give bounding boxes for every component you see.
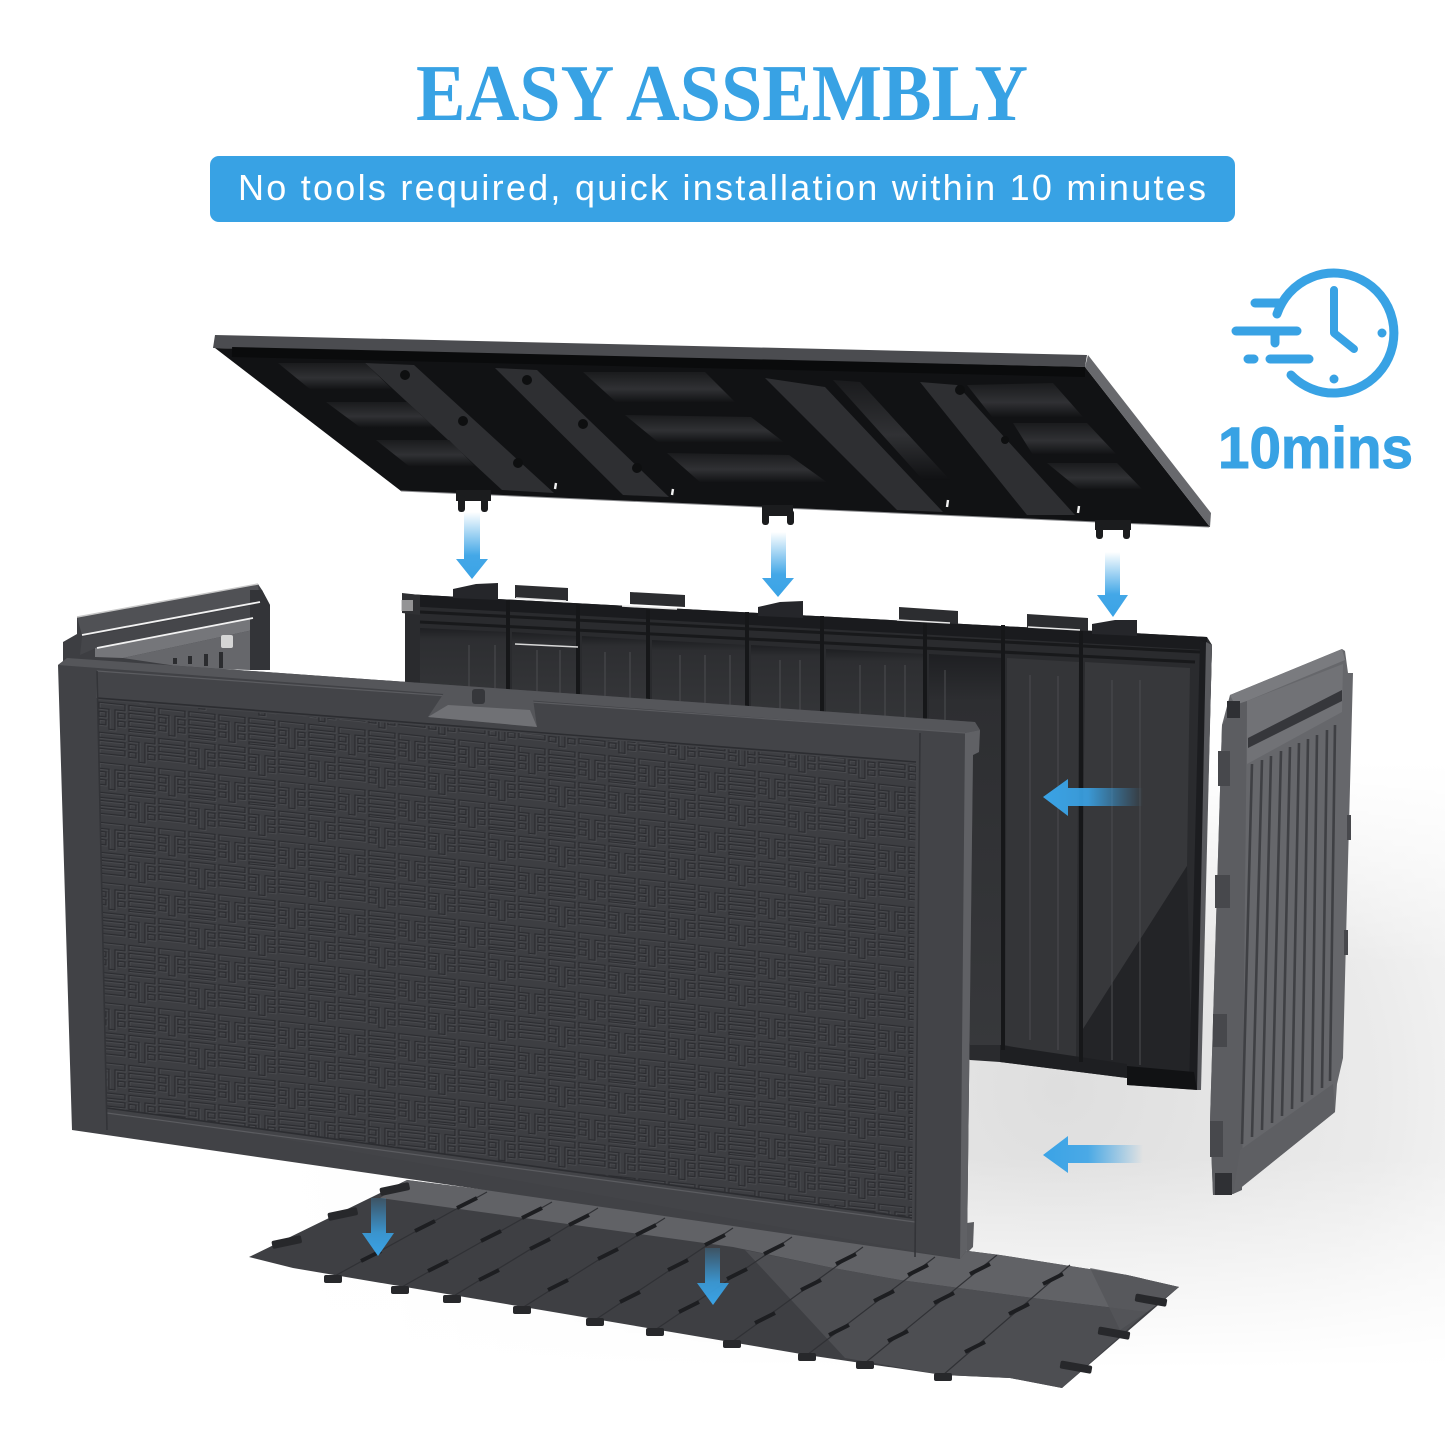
lid holes and marks: [400, 370, 1009, 473]
icon: fast clock: [1236, 273, 1394, 393]
subtitle banner: [210, 156, 1235, 222]
back panel: [405, 594, 1212, 1090]
arrow: lid centre: [762, 532, 794, 597]
back panel bays: [420, 628, 1190, 1062]
floor seams: [333, 1192, 1070, 1375]
back panel diagonal shadow: [1081, 866, 1192, 1085]
10 minutes label: 10mins: [1218, 416, 1413, 481]
floor lighter region: [745, 1250, 1147, 1388]
front panel top cap: [58, 658, 980, 733]
floor slots: [361, 1198, 1063, 1352]
subtitle banner: No tools required, quick installation within 10 minutes: [238, 167, 1206, 208]
lid hinges: [456, 490, 1131, 539]
floor edge tabs: [271, 1182, 1167, 1381]
title: EASY ASSEMBLY: [416, 48, 1028, 138]
arrow: side panel upper: [1043, 779, 1143, 816]
arrow: floor left: [362, 1198, 394, 1256]
side panel clips: [1210, 701, 1351, 1195]
front panel: [58, 658, 980, 1259]
lid strips: [365, 363, 1075, 515]
side panel bottom band: [1233, 1084, 1335, 1194]
floor reflection band: [380, 1180, 1179, 1312]
side panel: [1210, 649, 1353, 1195]
floor panel: [249, 1180, 1179, 1388]
side panel top band: [1247, 664, 1343, 764]
woven pattern: [97, 700, 916, 1218]
right edge strip: [960, 730, 980, 1259]
side panel slats: [1242, 725, 1335, 1144]
lid: [213, 335, 1211, 539]
front panel top rail: [97, 671, 965, 1259]
lid ribbed blocks: [278, 363, 1143, 490]
back panel tabs and hinge blocks: [401, 583, 1137, 636]
arrow: lid right: [1097, 552, 1128, 617]
left side panel behind front: [63, 584, 270, 670]
lid right edge: [1085, 355, 1211, 527]
arrow: floor right: [697, 1248, 729, 1305]
arrow: lid left: [456, 512, 488, 579]
arrow: side panel lower: [1043, 1136, 1143, 1173]
lid top edge: [213, 335, 1087, 367]
hinge recess: [428, 687, 537, 727]
